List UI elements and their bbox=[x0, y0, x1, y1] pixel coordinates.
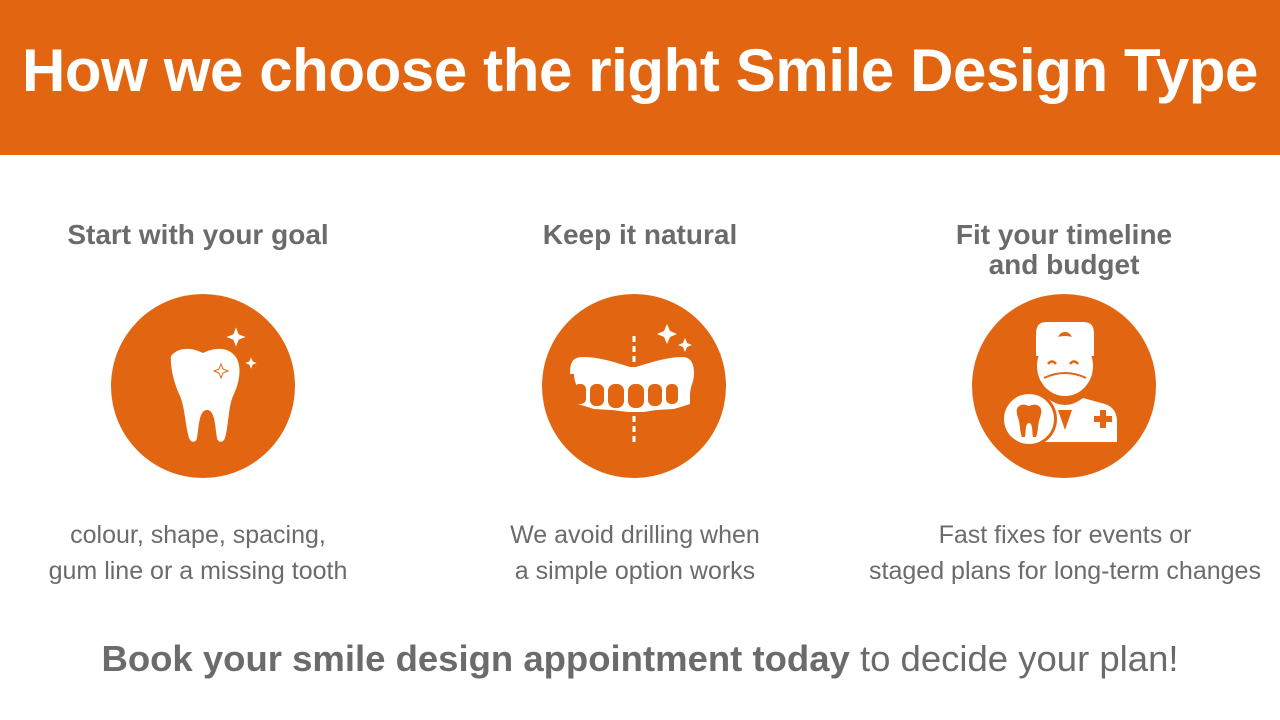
text: goal bbox=[49, 521, 347, 585]
heading: timeline bbox=[956, 219, 1172, 280]
icon: tooth with sparkles bbox=[111, 294, 295, 478]
text: natural: a simple option works bbox=[515, 557, 755, 585]
text: timeline bbox=[869, 521, 1261, 585]
heading: timeline: and budget bbox=[989, 249, 1139, 280]
title: How we choose the right Smile Design Type bbox=[22, 37, 1258, 104]
text: timeline: staged plans for long-term changes bbox=[869, 557, 1261, 585]
text: timeline: Fast fixes for events or bbox=[939, 521, 1191, 549]
heading: natural: Keep it natural bbox=[543, 219, 737, 250]
text: goal: gum line or a missing tooth bbox=[49, 557, 347, 585]
text: natural bbox=[510, 521, 760, 585]
text: natural: We avoid drilling when bbox=[510, 521, 760, 549]
text: goal: colour, shape, spacing, bbox=[70, 521, 326, 549]
icon: dentist bbox=[972, 294, 1156, 478]
call to action: Book your smile design appointment today to decide your plan! bbox=[101, 638, 1179, 679]
header banner bbox=[0, 0, 1280, 155]
heading: timeline: Fit your timeline bbox=[956, 219, 1172, 250]
heading: goal: Start with your goal bbox=[67, 219, 329, 250]
icon: teeth with midline bbox=[542, 294, 726, 478]
